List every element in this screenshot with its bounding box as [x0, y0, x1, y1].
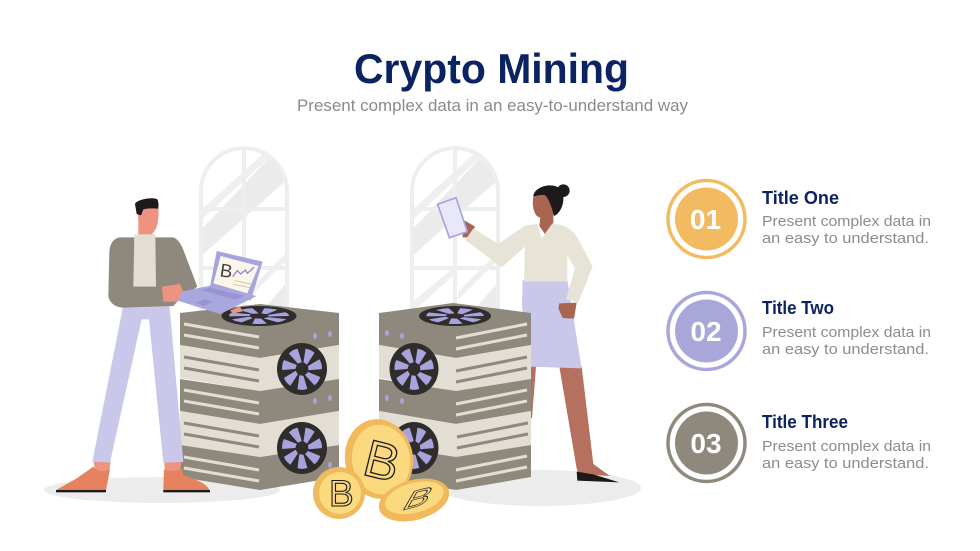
laptop: [178, 251, 263, 314]
ankles: [93, 460, 111, 472]
hand on hip: [558, 303, 577, 319]
phone: [438, 198, 467, 238]
neck and head: [137, 205, 159, 239]
item three: [668, 404, 931, 482]
item one: [668, 180, 931, 258]
text one: an easy to understand.: [762, 230, 929, 247]
coin flat: [374, 471, 454, 529]
shoes: [56, 467, 110, 490]
window left: [199, 148, 289, 315]
badge three: [668, 404, 745, 482]
heading one: Title One: [762, 188, 839, 208]
fan top: [222, 306, 296, 326]
badge two: [668, 292, 745, 370]
woman: [438, 184, 619, 482]
blouse: [465, 223, 593, 303]
fingers under laptop: [230, 307, 243, 313]
text three: [762, 438, 931, 472]
text one: [762, 213, 931, 247]
badge one: 01: [690, 204, 721, 235]
item two: [668, 292, 931, 370]
coin small: [313, 467, 365, 519]
coin large: B: [358, 429, 406, 494]
heading three: Title Three: [762, 412, 848, 432]
front leg: [559, 367, 610, 476]
badge one: [668, 180, 745, 258]
hair: [533, 185, 563, 216]
server right: [379, 303, 531, 490]
title: Crypto Mining: [354, 45, 629, 92]
neck and head: [539, 212, 553, 237]
fan front lower: [277, 422, 327, 474]
laptop screen B: B: [219, 259, 234, 282]
sweater: [108, 237, 197, 308]
skirt: [522, 280, 582, 368]
hand holding phone: [463, 219, 475, 237]
fan front upper: [390, 343, 438, 395]
floor shadow right: [439, 470, 641, 506]
hand: [162, 284, 185, 302]
text one: Present complex data in: [762, 213, 931, 230]
text two: Present complex data in: [762, 324, 931, 341]
back leg: [530, 367, 536, 418]
subtitle: Present complex data in an easy-to-understand way: [297, 96, 688, 115]
trousers: [92, 304, 183, 463]
window right: [410, 148, 500, 315]
undershirt: [133, 234, 156, 287]
badge three: 03: [690, 428, 722, 459]
floor shadow left: [44, 477, 280, 503]
coin flat: B: [397, 480, 440, 517]
text two: [762, 324, 931, 358]
fan front upper: [277, 343, 327, 395]
text three: an easy to understand.: [762, 455, 929, 472]
coin large: [339, 414, 419, 504]
fan top: [419, 306, 491, 326]
fan front lower: [390, 422, 438, 474]
man: [56, 198, 263, 492]
badge two: 02: [690, 316, 722, 347]
server left: [180, 304, 339, 490]
heading two: Title Two: [762, 298, 834, 318]
text three: Present complex data in: [762, 438, 931, 455]
text two: an easy to understand.: [762, 341, 929, 358]
hair: [135, 198, 159, 215]
coin small: B: [329, 473, 354, 514]
shoe: [577, 472, 619, 482]
